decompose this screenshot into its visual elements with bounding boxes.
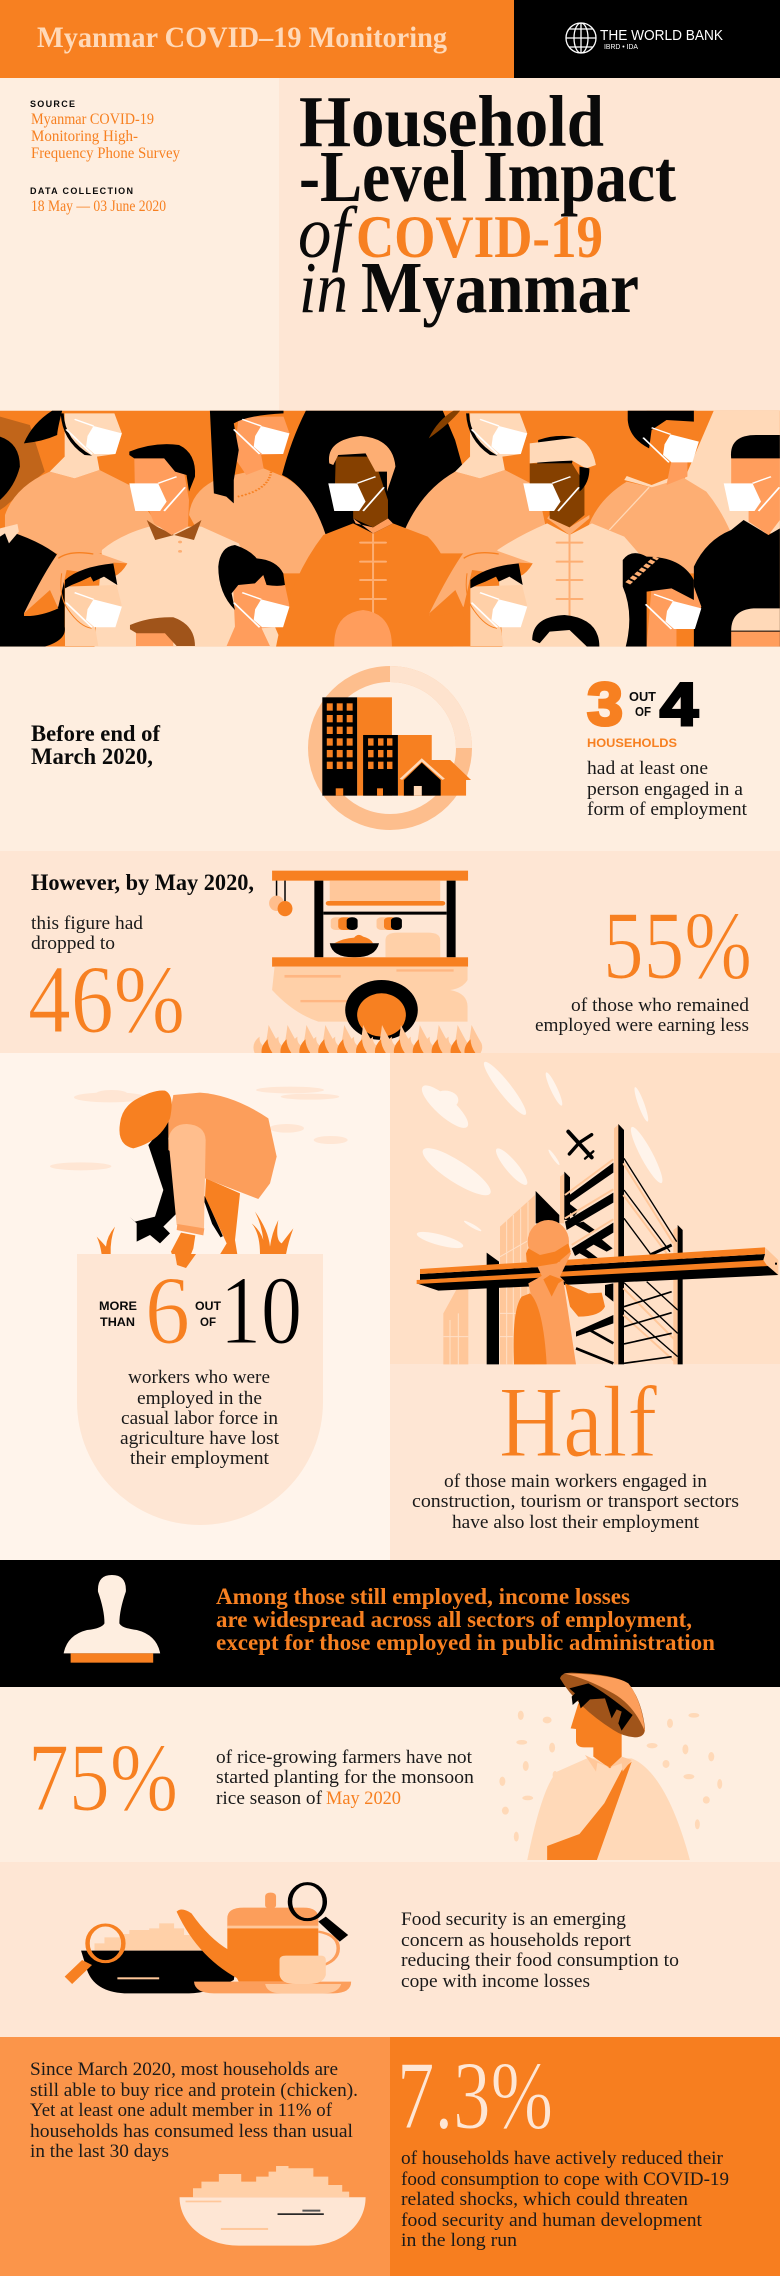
illustration: sky clouds (415, 1058, 667, 1251)
stat: 3 out of 4 households: person engaged in a (587, 780, 743, 800)
World Bank logo: THE WORLD BANK (600, 27, 723, 44)
text block: construction: construction, tourism or transport sectors (412, 1492, 739, 1512)
icon: buildings and house (322, 697, 471, 796)
text block: food security: Food security is an emerging (401, 1910, 626, 1930)
main title (298, 81, 676, 328)
heading: March 2020, (31, 744, 153, 769)
text block: rice farmers (216, 1748, 474, 1809)
illustration: crowd of masked people (0, 411, 780, 647)
heading: Before end of (31, 721, 160, 746)
stat: 3 out of 4 households (587, 671, 748, 820)
text block: food security: cope with income losses (401, 1972, 590, 1992)
text block: rice and protein: households has consumed less than usual (30, 2122, 353, 2142)
panel: food security (0, 1862, 780, 2037)
chart: ring three quarters (316, 674, 464, 822)
text block: agriculture: their employment (130, 1449, 270, 1469)
pocket shape background (77, 1254, 323, 1525)
person D (587, 475, 731, 573)
person: bottom heads (130, 617, 195, 646)
flames (253, 1025, 482, 1053)
text block: construction (412, 1472, 739, 1533)
text block: agriculture: agriculture have lost (120, 1429, 280, 1449)
stat: 7.3 percent: 7.3% (397, 2042, 553, 2150)
text block: agriculture: employed in the (137, 1389, 262, 1409)
text block: rice farmers: May 2020 (326, 1789, 401, 1809)
text block: food security: concern as households report (401, 1931, 632, 1951)
text block: rice and protein: Since March 2020, most households are (30, 2060, 338, 2080)
panel: by May 2020 (0, 851, 780, 1054)
panel: income losses banner (0, 1560, 780, 1687)
farmer hand over pocket (175, 1254, 196, 1268)
person: conical hat center (429, 545, 533, 646)
stat: more than 6 out of 10: 10 (220, 1257, 302, 1365)
source block (30, 99, 180, 215)
person E right (694, 520, 780, 647)
stat: 55 percent: employed were earning less (535, 1016, 749, 1036)
World Bank logo (566, 23, 723, 53)
source block: Myanmar COVID-19 (31, 111, 154, 128)
illustration: construction worker with beam (417, 1124, 778, 1364)
stat: 3 out of 4 households: 3 (587, 671, 623, 738)
panel: rice and protein (0, 2037, 390, 2276)
stat: 75 percent: 75% (28, 1724, 178, 1832)
stat: 46 percent: dropped to (31, 934, 115, 954)
stat: 3 out of 4 households: had at least one (587, 759, 708, 779)
panel: before March 2020 (0, 647, 780, 851)
stat: half: Half (499, 1366, 657, 1479)
person B (189, 468, 326, 573)
stat: 3 out of 4 households: HOUSEHOLDS (587, 736, 677, 750)
main title: Household (299, 81, 604, 162)
icon: airplane (568, 1132, 593, 1159)
banner text: Among those still employed, income losses (216, 1584, 630, 1609)
farmer head and hat (560, 1673, 645, 1772)
source block: SOURCE (30, 99, 75, 109)
text block: agriculture: casual labor force in (121, 1409, 278, 1429)
banner text: are widespread across all sectors of employment, (216, 1607, 692, 1632)
main title: Myanmar (361, 247, 639, 328)
stat: 46 percent (28, 914, 185, 1054)
person: bottom right head (731, 632, 780, 647)
text block: reduced consumption: in the long run (401, 2231, 517, 2251)
text block: reduced consumption: of households have actively reduced their (401, 2149, 723, 2169)
text block: agriculture (120, 1368, 280, 1469)
heading: However, by May 2020, (31, 870, 254, 895)
text block: rice and protein: Yet at least one adult member in 11% of (30, 2101, 333, 2121)
text block: rice farmers: started planting for the monsoon (216, 1768, 474, 1788)
source block: Monitoring High- (31, 128, 138, 145)
panel: construction workers (390, 1053, 780, 1560)
stat: 46 percent: 46% (28, 946, 185, 1054)
stat: more than 6 out of 10 (99, 1257, 302, 1365)
worker (565, 1283, 605, 1317)
text block: reduced consumption: related shocks, which could threaten (401, 2190, 688, 2210)
farmer body and grains (499, 1711, 722, 1860)
buildings (443, 1280, 468, 1364)
grass (97, 1212, 293, 1254)
scaffold (614, 1124, 619, 1364)
stat: more than 6 out of 10: MORE (99, 1299, 137, 1313)
stat: 55 percent (535, 892, 752, 1036)
main title: in (299, 247, 348, 328)
text block: reduced consumption (401, 2149, 729, 2251)
text block: reduced consumption: food consumption to cope with COVID-19 (401, 2170, 729, 2190)
header bar (0, 0, 780, 78)
panel: 7.3 percent (390, 2037, 780, 2276)
icon: stamp (64, 1575, 160, 1663)
person: head wrap, cream shirt (497, 523, 642, 647)
stat: 46 percent: this figure had (31, 914, 144, 934)
main title: of (298, 192, 358, 273)
panel: agriculture workers (0, 1053, 390, 1560)
header title: Myanmar COVID–19 Monitoring (37, 21, 447, 54)
text block: construction: have also lost their employment (452, 1513, 700, 1533)
panel: rice farmers (0, 1673, 780, 1862)
stat: more than 6 out of 10: THAN (100, 1315, 135, 1329)
main title: -Level Impact (299, 136, 676, 217)
text block: rice and protein: still able to buy rice and protein (chicken). (30, 2081, 358, 2101)
source block: Frequency Phone Survey (31, 145, 180, 162)
stat: 3 out of 4 households: form of employment (587, 800, 748, 820)
person: bun hair (218, 545, 289, 646)
text block: agriculture: workers who were (128, 1368, 270, 1388)
illustration: bending farmer (50, 1087, 348, 1265)
beam (417, 1263, 778, 1291)
illustration: food cart (253, 871, 482, 1053)
source block: DATA COLLECTION (30, 186, 133, 196)
person A (5, 470, 159, 553)
illustration: farmer with conical hat (499, 1673, 722, 1860)
stat: more than 6 out of 10: OF (200, 1315, 216, 1329)
main title: COVID-19 (356, 204, 603, 270)
illustration: wok, teapot and magnifiers (65, 1884, 351, 1993)
text block: food security (401, 1910, 679, 1992)
text block: rice farmers: rice season of (216, 1789, 323, 1809)
stat: 3 out of 4 households: OF (635, 705, 651, 719)
person: conical hat left (24, 545, 127, 646)
stat: 55 percent: 55% (603, 892, 752, 1000)
person C (405, 470, 547, 553)
text block: rice farmers: of rice-growing farmers have not (216, 1748, 473, 1768)
icon: globe (566, 23, 596, 53)
person: girl with flowers (647, 587, 701, 647)
person: bottom left black shirt (0, 528, 65, 647)
text block: construction: of those main workers engaged in (444, 1472, 707, 1492)
World Bank logo: IBRD • IDA (604, 42, 638, 51)
banner text: except for those employed in public administration (216, 1630, 715, 1655)
source block: 18 May — 03 June 2020 (31, 198, 166, 215)
wheel (345, 980, 418, 1040)
text block: rice and protein (30, 2060, 358, 2162)
stat: more than 6 out of 10: 6 (145, 1257, 190, 1365)
text block: reduced consumption: food security and human development (401, 2211, 703, 2231)
panel: title and source (0, 78, 780, 411)
person: collar shirt (95, 527, 284, 647)
person: center with orange shirt (276, 523, 468, 647)
stat: 3 out of 4 households: OUT (629, 690, 656, 704)
stat: 55 percent: of those who remained (571, 996, 750, 1016)
text block: rice and protein: in the last 30 days (30, 2142, 169, 2162)
illustration: rice bowl (180, 2166, 366, 2246)
text block: food security: reducing their food consumption to (401, 1951, 679, 1971)
banner text (216, 1584, 715, 1655)
stat: 3 out of 4 households: 4 (660, 671, 699, 738)
heading (31, 721, 160, 769)
stat: more than 6 out of 10: OUT (195, 1299, 222, 1313)
